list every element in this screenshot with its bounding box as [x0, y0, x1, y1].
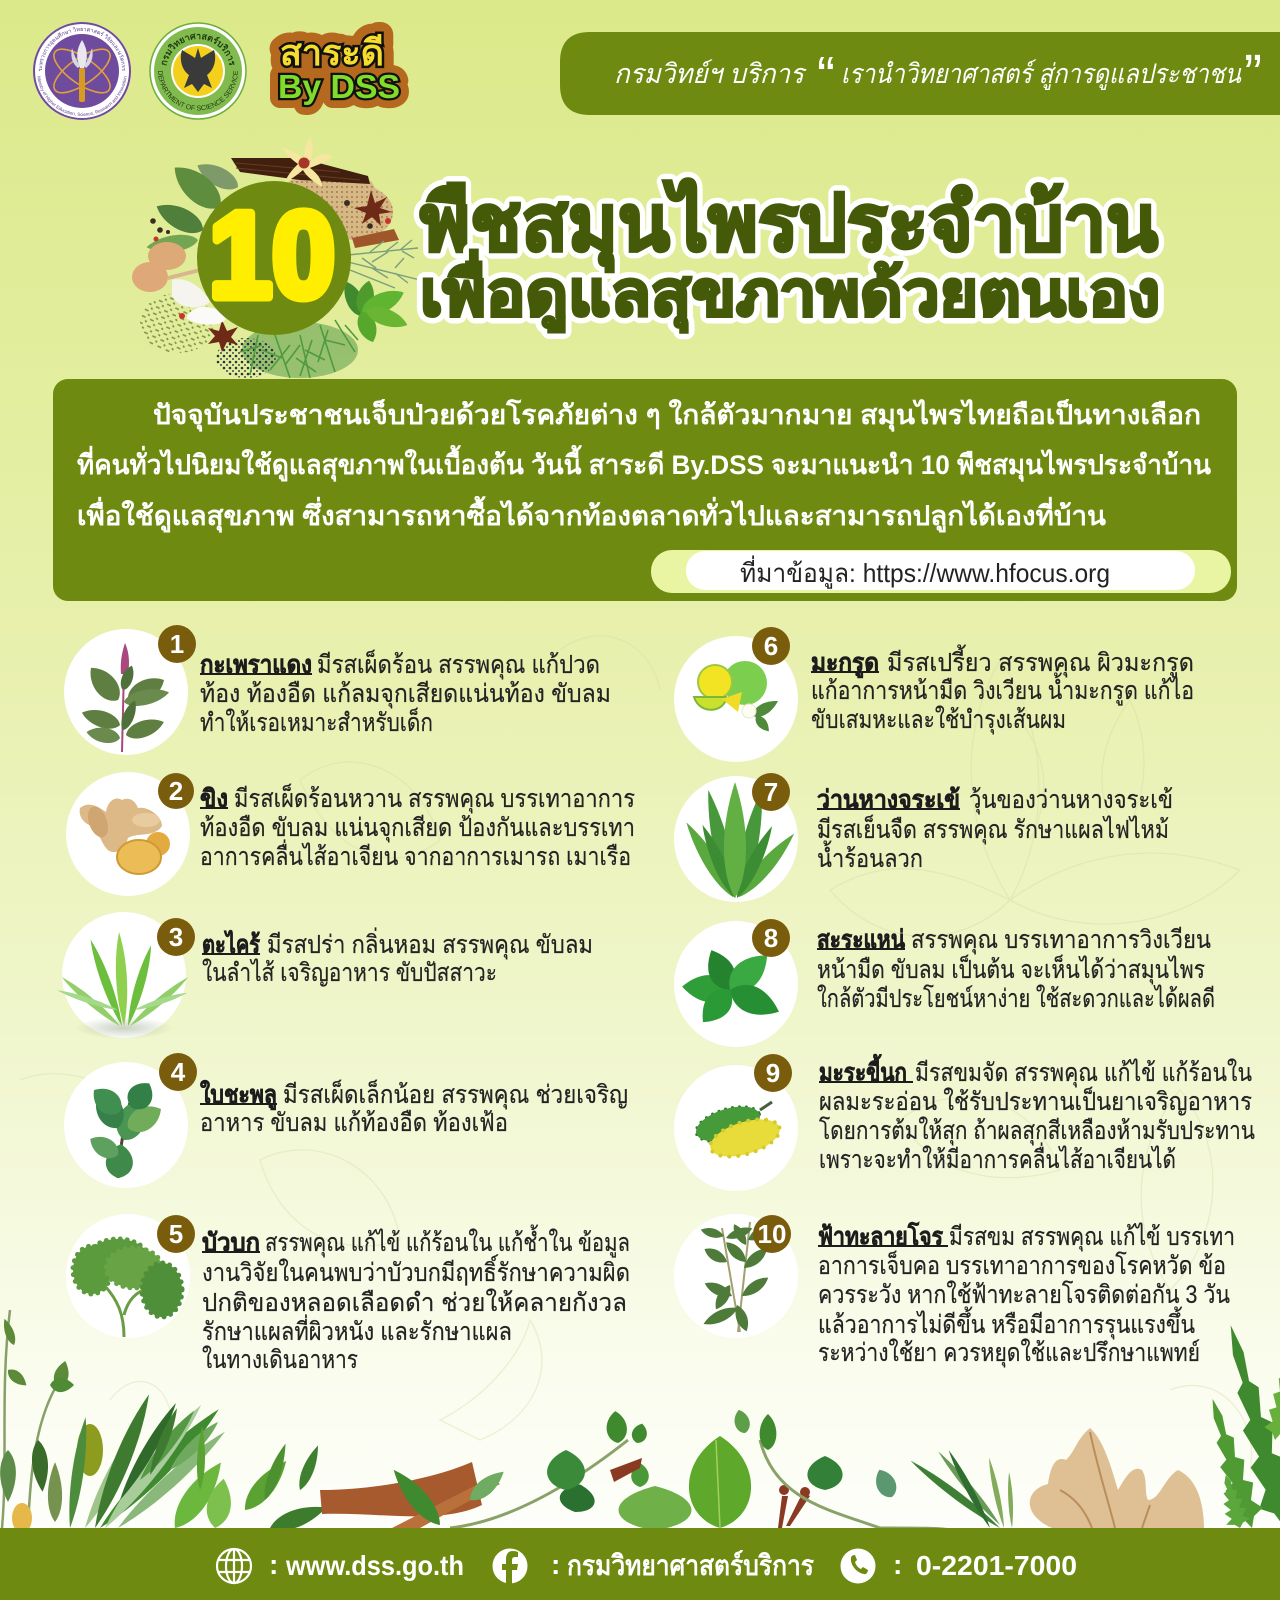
vine with round leaves: [450, 1410, 649, 1528]
dill fronds: [240, 320, 358, 378]
icon: phone: [840, 1548, 876, 1584]
circle: betel leaf: [64, 1062, 188, 1188]
item 3: [56, 912, 593, 1039]
bay leaves: [145, 157, 242, 255]
text 7: น้ำร้อนลวก: [817, 840, 923, 873]
badge 4: 4: [171, 1057, 186, 1087]
logo: sarati by DSS: สาระดี: [280, 32, 384, 73]
text 10: มีรสขม สรรพคุณ แก้ไข้ บรรเทา: [949, 1222, 1235, 1252]
intro text: เพื่อใช้ดูแลสุขภาพ ซึ่งสามารถหาซื้อได้จากท้องตลาดทั่วไปและสามารถปลูกได้เองที่บ้าน: [77, 495, 1107, 533]
text 3: ในลำไส้ เจริญอาหาร ขับปัสสาวะ: [202, 958, 497, 987]
logo: sarati by DSS: By DSS: [278, 68, 400, 105]
badge 10: 10: [758, 1219, 786, 1249]
title: เพื่อดูแลสุขภาพด้วยตนเอง: [420, 250, 1160, 332]
large leaves centre: [619, 1436, 751, 1530]
badge 2: [158, 773, 194, 809]
circle: holy basil: [64, 629, 188, 755]
badge 9: 9: [766, 1058, 780, 1088]
badge 3: [157, 918, 195, 956]
text 2: มีรสเผ็ดร้อนหวาน สรรพคุณ บรรเทาอาการ: [234, 783, 635, 814]
rosemary sprig: [348, 240, 420, 288]
item 7: [674, 773, 1173, 902]
footer bar: [0, 1528, 1280, 1600]
badge 8: 8: [764, 923, 778, 953]
logo: sarati by DSS: [278, 32, 400, 105]
right arugula: [1197, 1320, 1280, 1533]
text 4: [200, 1079, 628, 1137]
text 9: [819, 1053, 1255, 1174]
top slogan banner: กรมวิทย์ฯ บริการ: [614, 59, 807, 89]
source pill: ที่มาข้อมูล: https://www.hfocus.org: [740, 555, 1110, 589]
item 2: [66, 772, 635, 896]
logo: department of science service: [149, 22, 247, 120]
text 7: วุ้นของว่านหางจระเข้: [969, 786, 1173, 815]
phone number: 0-2201-7000: [916, 1550, 1077, 1581]
badge 7: [752, 773, 790, 811]
bay leaf sprig: [165, 1426, 329, 1536]
text 4: อาหาร ขับลม แก้ท้องอืด ท้องเฟ้อ: [200, 1109, 508, 1137]
text 10: แล้วอาการไม่ดีขึ้น หรือมีอาการรุนแรงขึ้น: [818, 1306, 1195, 1340]
text 2: อาการคลื่นไส้อาเจียน จากอาการเมารถ เมาเรือ: [200, 839, 631, 871]
badge 2: 2: [169, 776, 183, 806]
item 10: [674, 1214, 1235, 1368]
item 9: [674, 1053, 1255, 1191]
text 4: มีรสเผ็ดเล็กน้อย สรรพคุณ ช่วยเจริญ: [283, 1079, 628, 1110]
garlic cloves: [172, 279, 226, 325]
badge 6: [752, 627, 790, 665]
source pill: [651, 550, 1231, 593]
department name: กรมวิทยาศาสตร์บริการ: [567, 1550, 814, 1581]
logo: sarati by DSS: สาระดี: [280, 32, 384, 73]
title: พืชสมุนไพรประจำบ้าน: [420, 178, 1158, 272]
text 6: แก้อาการหน้ามืด วิงเวียน น้ำมะกรูด แก้ไอ: [811, 672, 1194, 706]
item 4: [64, 1053, 628, 1188]
intro text: ปัจจุบันประชาชนเจ็บป่วยด้วยโรคภัยต่าง ๆ ใกล้ตัวมากมาย สมุนไพรไทยถือเป็นทางเลือก: [153, 397, 1201, 432]
text 1: กะเพราแดง: [200, 651, 312, 679]
seeds and spice backdrop: [140, 170, 393, 378]
text 6: มะกรูด: [811, 649, 879, 679]
text 6: [811, 644, 1194, 735]
circle: lemongrass: [56, 912, 191, 1039]
text 1: มีรสเผ็ดร้อน สรรพคุณ แก้ปวด: [317, 649, 600, 680]
text 5: ในทางเดินอาหาร: [202, 1345, 358, 1374]
badge 5: 5: [169, 1219, 183, 1249]
text 5: บัวบก: [202, 1229, 260, 1257]
number 10 badge: 10: [209, 187, 335, 323]
herb cluster illustration: [132, 137, 420, 378]
badge 10: [753, 1215, 791, 1253]
circle: andrographis: [674, 1214, 798, 1338]
right rosemary: [908, 1449, 1014, 1531]
badge 7: 7: [764, 777, 778, 807]
item 6: [674, 627, 1194, 762]
rosemary bundle: [64, 1392, 230, 1534]
text 9: เพราะจะทำให้มีอาการคลื่นไส้อาเจียนได้: [819, 1142, 1176, 1174]
logo: ministry seal: Ministry of Higher Education, Science, Research and Innovation: [37, 76, 127, 116]
left climbing stems: [0, 1310, 103, 1533]
text 8: สรรพคุณ บรรเทาอาการวิงเวียน: [911, 926, 1211, 955]
text 5: สรรพคุณ แก้ไข้ แก้ร้อนใน แก้ช้ำใน ข้อมูล: [265, 1224, 630, 1258]
top slogan banner: [560, 32, 1280, 115]
icon: facebook: [492, 1548, 528, 1584]
website: www.dss.go.th: [285, 1550, 464, 1581]
text 10: ระหว่างใช้ยา ควรหยุดใช้และปรึกษาแพทย์: [818, 1338, 1200, 1368]
cloves: [778, 1485, 810, 1528]
ginger root: [1030, 1428, 1204, 1528]
badge 8: [752, 919, 790, 957]
text 9: มะระขี้นก: [819, 1053, 907, 1087]
circle: ginger: [66, 772, 190, 896]
text 6: ขับเสมหะและใช้บำรุงเส้นผม: [811, 705, 1066, 735]
text 7: มีรสเย็นจืด สรรพคุณ รักษาแผลไฟไหม้: [817, 814, 1169, 845]
text 8: หน้ามืด ขับลม เป็นต้น จะเห็นได้ว่าสมุนไพร: [817, 954, 1205, 985]
badge 6: 6: [764, 631, 778, 661]
text 5: ปกติของหลอดเลือดดำ ช่วยให้คลายกังวล: [202, 1288, 627, 1317]
cinnamon: [352, 229, 399, 248]
text 2: ท้องอืด ขับลม แน่นจุกเสียด ป้องกันและบรรเทา: [200, 814, 635, 843]
logo: department of science service: DEPARTMENT OF SCIENCE SERVICE: [158, 70, 238, 110]
intro panel: [53, 379, 1237, 601]
text 2: ขิง: [200, 785, 228, 813]
footer bar: :: [893, 1549, 902, 1580]
text 3: [202, 927, 593, 987]
logo: ministry seal: [33, 22, 131, 120]
footer bar: :: [269, 1549, 278, 1580]
logo: department of science service: กรมวิทยาศาสตร์บริการ: [162, 33, 234, 66]
cinnamon sticks: [320, 1462, 500, 1528]
text 7: [817, 786, 1173, 873]
title: พืชสมุนไพรประจำบ้าน: [420, 178, 1158, 272]
item 5: [66, 1214, 630, 1374]
circle: mint: [674, 921, 798, 1047]
text 3: ตะไคร้: [202, 929, 260, 959]
vanilla pods and flower: [231, 137, 370, 187]
circle: gotu kola: [66, 1214, 190, 1338]
item 8: [674, 919, 1215, 1047]
second vine: [732, 1408, 950, 1530]
text 10: ฟ้าทะลายโจร: [818, 1221, 943, 1251]
circle: aloe vera: [674, 776, 799, 902]
item 1: [64, 625, 611, 755]
text 5: รักษาแผลที่ผิวหนัง และรักษาแผล: [202, 1314, 512, 1346]
text 2: [200, 783, 635, 871]
basil leaves: [339, 278, 410, 345]
icon: globe: [217, 1549, 251, 1583]
logo: sarati by DSS: By DSS: [278, 68, 400, 105]
bottom herb border: [0, 1310, 1280, 1536]
top slogan banner: “: [817, 46, 835, 106]
badge 1: [158, 625, 196, 663]
text 7: ว่านหางจระเข้: [817, 786, 960, 814]
text 1: [200, 649, 611, 737]
text 1: ทำให้เรอเหมาะสำหรับเด็ก: [200, 707, 433, 737]
text 5: งานวิจัยในคนพบว่าบัวบกมีฤทธิ์รักษาความผิด: [202, 1254, 630, 1287]
star anise: [208, 190, 392, 352]
text 4: ใบชะพลู: [200, 1079, 277, 1111]
title: เพื่อดูแลสุขภาพด้วยตนเอง: [420, 250, 1160, 332]
footer bar: :: [551, 1549, 560, 1580]
top slogan banner: ”: [1244, 44, 1262, 104]
peppercorns: [150, 200, 391, 319]
text 8: สะระแหน่: [817, 926, 905, 954]
circle: kaffir lime: [674, 636, 798, 762]
badge 1: 1: [170, 629, 184, 659]
intro text: [77, 397, 1212, 533]
intro text: ที่คนทั่วไปนิยมใช้ดูแลสุขภาพในเบื้องต้น วันนี้ สาระดี By.DSS จะมาแนะนำ 10 พืชสมุนไพรประจำบ้าน: [77, 444, 1212, 482]
circle: bitter cucumber: [674, 1065, 798, 1191]
text 3: มีรสปร่า กลิ่นหอม สรรพคุณ ขับลม: [267, 927, 593, 960]
text 5: [202, 1224, 630, 1374]
cinnamon leaf: [386, 1464, 509, 1531]
badge 3: 3: [169, 922, 183, 952]
text 6: มีรสเปรี้ยว สรรพคุณ ผิวมะกรูด: [887, 644, 1194, 678]
text 8: [817, 926, 1215, 1013]
badge 9: [754, 1054, 792, 1092]
poppy heads: [132, 242, 200, 292]
faint botanical line art: [20, 636, 1252, 1470]
badge 4: [159, 1053, 197, 1091]
title: [420, 178, 1160, 332]
text 10: [818, 1221, 1235, 1368]
text 1: ท้อง ท้องอืด แก้ลมจุกเสียดแน่นท้อง ขับลม: [200, 680, 611, 709]
badge 5: [157, 1215, 195, 1253]
